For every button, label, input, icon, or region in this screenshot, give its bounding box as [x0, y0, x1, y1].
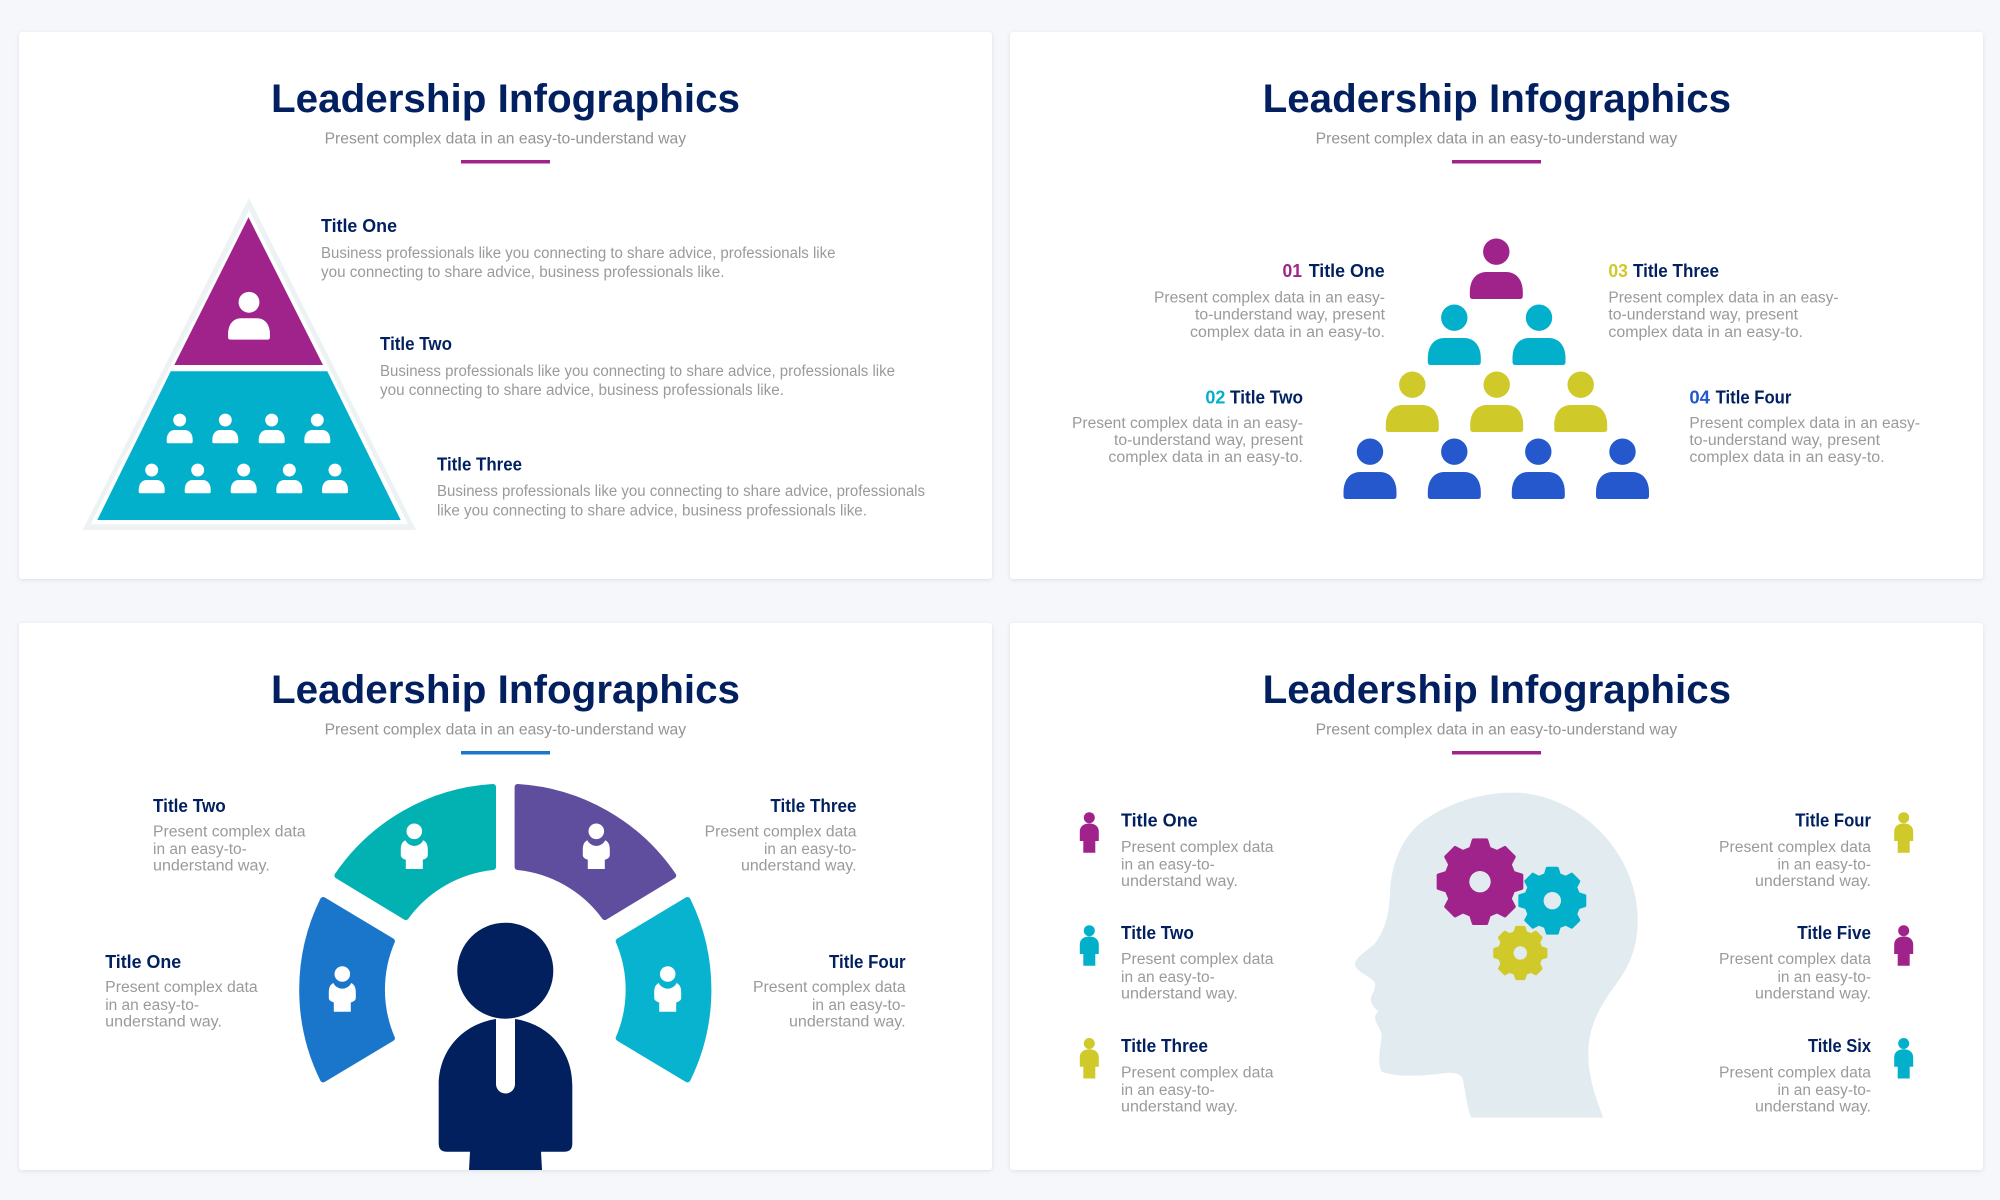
text block: title six: understand way. — [1755, 1098, 1871, 1116]
text block: 01 title one: to-understand way, present — [1195, 307, 1386, 324]
card background — [1010, 623, 1983, 1170]
text block: title three: Title Three — [437, 454, 522, 474]
text block: 03 title three: complex data in an easy-to. — [1608, 324, 1803, 341]
text block: title three — [1121, 1036, 1274, 1116]
text block: 04 title four — [1689, 387, 1920, 466]
text block: 03 title three: to-understand way, present — [1608, 307, 1799, 324]
text block: title one — [1121, 811, 1274, 890]
text block: title five: Title Five — [1797, 923, 1871, 943]
row 1 leader — [1470, 238, 1523, 299]
icon: person magenta left — [1080, 812, 1099, 853]
central leader figure — [439, 923, 572, 1170]
text block: title three: understand way. — [741, 858, 856, 875]
text block: title three: in an easy-to- — [1121, 1082, 1215, 1099]
text block: title three: Title Three — [770, 796, 856, 816]
text block: 01 title one: complex data in an easy-to. — [1190, 324, 1385, 341]
text block: title four: in an easy-to- — [1778, 856, 1871, 873]
text block: title six: Present complex data — [1719, 1064, 1871, 1081]
text block: title four — [1719, 811, 1871, 890]
text block: title two: you connecting to share advice, business professionals like. — [380, 382, 784, 399]
icon: person cyan right — [1894, 1038, 1913, 1078]
text block: title three: Title Three — [1121, 1036, 1208, 1056]
text block: 02 title two: 02 — [1205, 387, 1225, 407]
icon: leader — [228, 292, 270, 340]
text block: title three — [705, 796, 857, 875]
text block: 01 title one: Present complex data in an easy- — [1154, 290, 1385, 306]
text block: title one: in an easy-to- — [105, 997, 199, 1014]
leader head — [457, 923, 553, 1019]
text block: title one: you connecting to share advice, business professionals like. — [321, 264, 724, 281]
arc segment: cyan — [619, 900, 708, 1079]
head silhouette — [1355, 793, 1638, 1118]
pyramid outline — [83, 198, 416, 530]
title: Leadership Infographics — [271, 668, 740, 712]
text block: 04 title four: Title Four — [1716, 387, 1791, 407]
text block: title four: Title Four — [829, 952, 906, 972]
title: Leadership Infographics — [271, 77, 740, 121]
text block: title five: in an easy-to- — [1778, 969, 1871, 986]
text block: title four — [753, 952, 906, 1030]
title: Leadership Infographics — [1263, 77, 1731, 121]
gears — [1438, 840, 1585, 979]
text block: title two: understand way. — [1121, 986, 1238, 1002]
text block: 03 title three: Present complex data in an easy- — [1608, 290, 1839, 306]
text block: 03 title three: 03 — [1608, 261, 1628, 281]
text block: title two: Title Two — [153, 796, 226, 816]
text block: title five: understand way. — [1755, 986, 1871, 1002]
row 3 people — [1386, 372, 1607, 432]
title underline — [1452, 751, 1541, 754]
text block: title two: Present complex data — [1121, 951, 1274, 968]
subtitle: Present complex data in an easy-to-understand way — [1316, 722, 1677, 738]
text block: 01 title one — [1154, 261, 1386, 341]
text block: 02 title two: to-understand way, present — [1114, 432, 1304, 449]
text block: title one: Title One — [105, 952, 181, 972]
text block: title four: in an easy-to- — [812, 997, 906, 1014]
text block: 02 title two — [1072, 387, 1304, 466]
leader body — [439, 1019, 572, 1170]
panel: people pyramid — [1010, 32, 1983, 579]
pyramid top tier — [174, 217, 323, 365]
text block: title three: in an easy-to- — [764, 841, 856, 858]
text block: title six — [1719, 1036, 1871, 1116]
arc segment: purple — [518, 787, 673, 917]
text block: title two: Present complex data — [153, 824, 306, 840]
subtitle: Present complex data in an easy-to-understand way — [1316, 130, 1677, 148]
panel: head with gears — [1010, 623, 1983, 1170]
text block: title four: Present complex data — [1719, 839, 1871, 856]
title underline — [1452, 160, 1541, 164]
subtitle: Present complex data in an easy-to-understand way — [325, 722, 686, 738]
title: Leadership Infographics — [1263, 668, 1731, 712]
text block: title one: understand way. — [1121, 873, 1238, 890]
text block: title four: Present complex data — [753, 979, 906, 996]
pyramid chart — [83, 198, 416, 530]
arc segment: teal — [337, 787, 493, 917]
text block: title two — [380, 334, 895, 399]
text block: 02 title two: complex data in an easy-to. — [1108, 449, 1303, 466]
text block: 04 title four: Present complex data in an easy- — [1689, 415, 1920, 432]
icons: team — [139, 414, 348, 493]
segment icons — [329, 824, 681, 1012]
text block: 02 title two: Present complex data in an easy- — [1072, 415, 1303, 432]
row 2 people — [1428, 304, 1566, 365]
text block: title three: Business professionals like you connecting to share advice, professionals — [437, 483, 925, 500]
text block: title two: in an easy-to- — [153, 841, 247, 858]
text block: 02 title two: Title Two — [1230, 387, 1303, 407]
text block: 03 title three: Title Three — [1633, 261, 1719, 281]
card background — [19, 32, 992, 579]
title underline — [461, 160, 550, 164]
text block: title five — [1719, 923, 1871, 1002]
text block: title one: Business professionals like you connecting to share advice, professionals like — [321, 245, 836, 262]
text block: title one — [321, 216, 836, 281]
text block: title two — [153, 796, 306, 875]
text block: 01 title one: Title One — [1309, 261, 1385, 281]
panel: leader arc — [19, 623, 992, 1170]
text block: title four: understand way. — [789, 1013, 906, 1030]
text block: title one: Present complex data — [105, 979, 258, 996]
text block: 03 title three — [1608, 261, 1839, 341]
icon: person yellow left — [1080, 1038, 1099, 1078]
gear: cyan — [1520, 868, 1585, 933]
text block: title two: understand way. — [153, 858, 270, 875]
text block: title three — [437, 454, 925, 520]
text block: title four: Title Four — [1795, 811, 1871, 831]
text block: 01 title one: 01 — [1282, 261, 1302, 281]
text block: title one: in an easy-to- — [1121, 856, 1215, 873]
text block: title two: Title Two — [380, 334, 452, 354]
icon: person cyan left — [1080, 925, 1099, 966]
people pyramid chart — [1344, 238, 1649, 499]
text block: title two: Business professionals like you connecting to share advice, professionals like — [380, 363, 895, 380]
text block: title four: understand way. — [1755, 873, 1871, 890]
card background — [1010, 32, 1983, 579]
text block: title two — [1121, 923, 1274, 1002]
text block: title two: Title Two — [1121, 923, 1194, 943]
pyramid bottom tier — [97, 371, 401, 520]
icon: person yellow right — [1894, 812, 1913, 853]
text block: title three: Present complex data — [705, 824, 857, 840]
text block: title two: in an easy-to- — [1121, 969, 1215, 986]
icon: person magenta right — [1894, 925, 1913, 966]
text block: title five: Present complex data — [1719, 951, 1871, 968]
text block: title three: like you connecting to share advice, business professionals like. — [437, 502, 867, 520]
text block: title one: understand way. — [105, 1013, 222, 1030]
text block: 04 title four: to-understand way, present — [1689, 432, 1881, 449]
text block: title three: Present complex data — [1121, 1064, 1274, 1081]
row 4 people — [1344, 438, 1649, 499]
text block: title six: Title Six — [1808, 1036, 1871, 1056]
subtitle: Present complex data in an easy-to-understand way — [325, 130, 686, 148]
text block: 04 title four: 04 — [1689, 387, 1710, 407]
text block: title one — [105, 952, 258, 1030]
arc segment: blue — [302, 900, 392, 1079]
text block: title one: Title One — [1121, 811, 1198, 831]
text block: title three: understand way. — [1121, 1098, 1238, 1116]
text block: 04 title four: complex data in an easy-to. — [1689, 449, 1885, 466]
text block: title one: Title One — [321, 216, 397, 236]
card background — [19, 623, 992, 1170]
text block: title one: Present complex data — [1121, 839, 1274, 856]
gear: yellow — [1494, 927, 1546, 979]
title underline — [461, 751, 550, 754]
text block: title six: in an easy-to- — [1778, 1082, 1871, 1099]
panel: pyramid — [19, 32, 992, 579]
gear: magenta — [1438, 840, 1522, 924]
